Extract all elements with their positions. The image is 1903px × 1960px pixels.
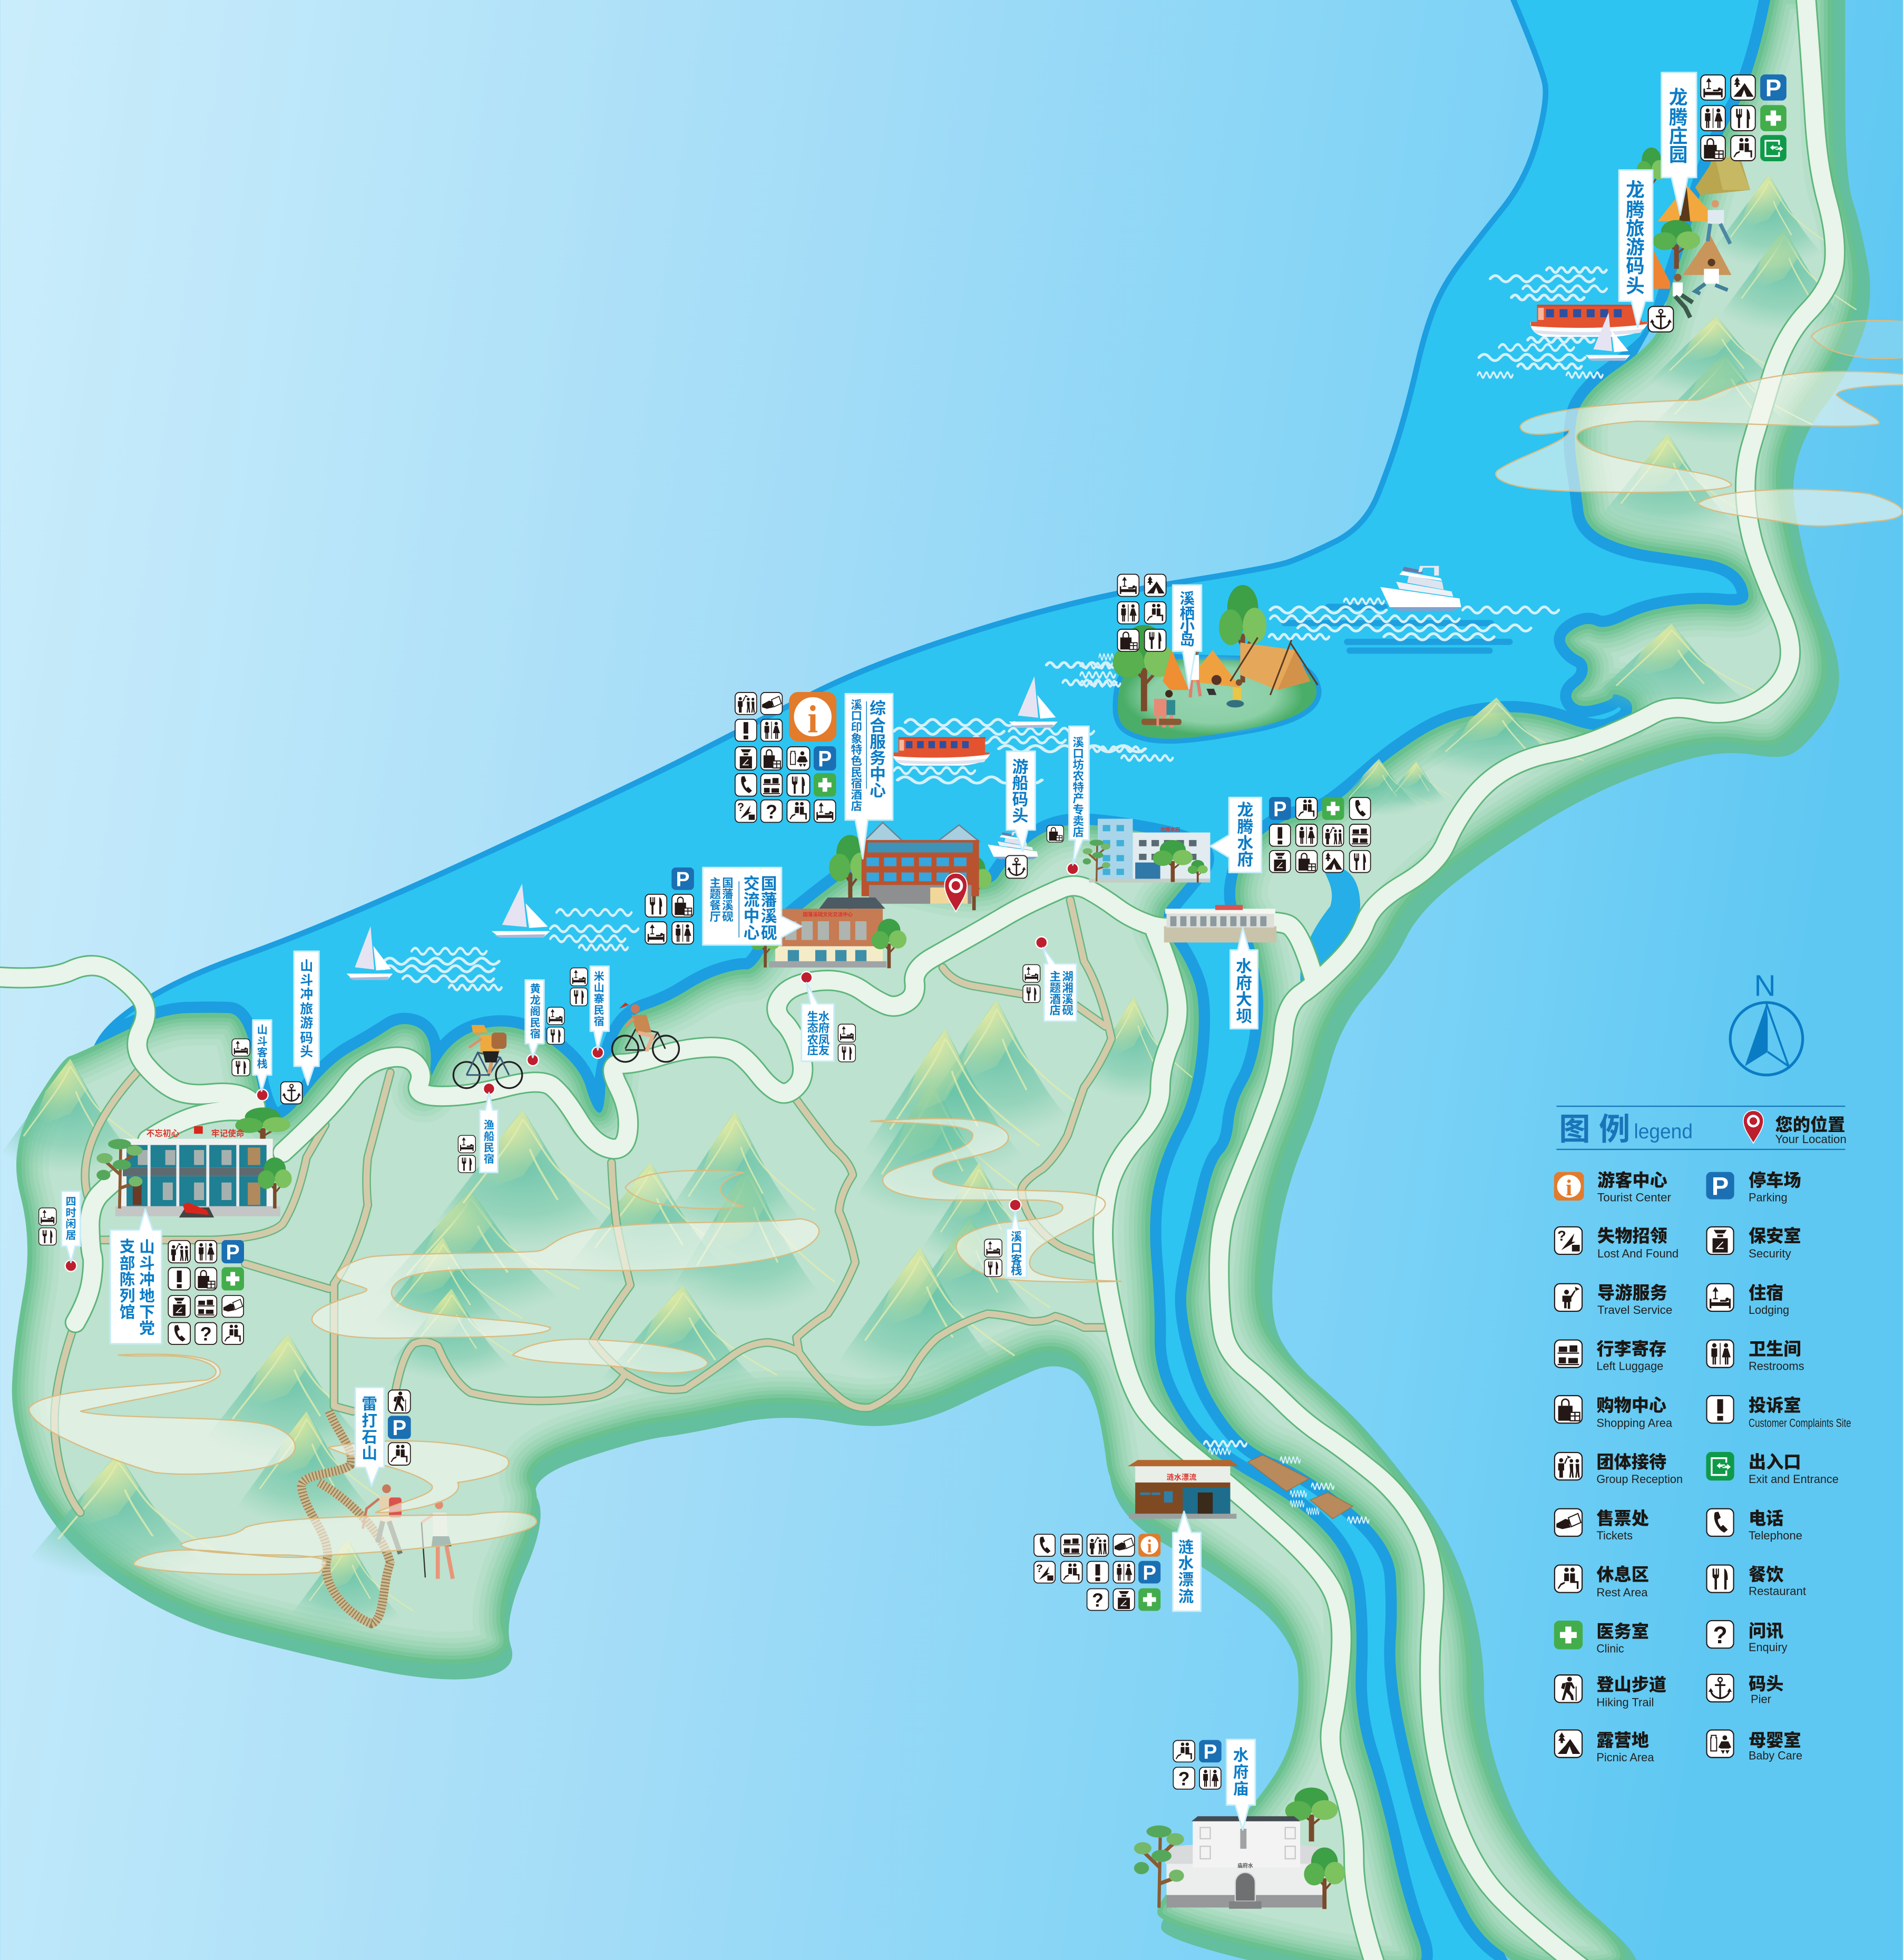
legend item: restrooms: 卫生间 [1749,1340,1801,1359]
small yacht at pier [988,832,1038,859]
legend item: restaurant: Restaurant [1749,1584,1807,1597]
legend item: left luggage: Left Luggage [1596,1360,1663,1373]
icon cluster: xikou inn [984,1239,1002,1276]
label: 湖湘溪砚主题酒店 [1043,948,1077,1021]
legend item: left luggage: 行李寄存 [1596,1340,1666,1359]
icon cluster: longteng manor [1701,74,1787,161]
legend item: hiking trail [1555,1675,1666,1709]
legend item: restaurant [1706,1565,1807,1597]
legend item: travel service: Travel Service [1597,1303,1672,1317]
legend header: 图 例 [1559,1111,1630,1147]
label: 雷打石山 [355,1388,384,1486]
icon: pier north [1648,306,1673,332]
yacht [1380,566,1461,611]
legend item: group reception: 团体接待 [1596,1453,1666,1473]
icon cluster: leidashi mountain [388,1390,411,1465]
legend item: parking: 停车场 [1749,1171,1801,1191]
label: 龙腾旅游码头: 龙腾旅游码头 [1626,179,1645,297]
label: 山斗冲旅游码头: 山斗冲旅游码头 [300,959,313,1059]
icon cluster: island [1117,574,1166,651]
legend item: tourist center: 游客中心 [1597,1171,1667,1191]
legend item: group reception: Group Reception [1596,1473,1683,1486]
legend item: left luggage [1555,1340,1666,1373]
legend item: clinic: Clinic [1596,1642,1624,1655]
red point markers [65,863,1078,1272]
label: 黄龙阁民宿 [525,980,544,1058]
building: shuifu temple: 庙府水 [1237,1862,1253,1869]
label: 龙腾水府: 龙腾水府 [1237,801,1253,869]
legend item: tickets [1555,1509,1649,1542]
label: 综合服务中心 [845,694,893,859]
rafts [1248,1455,1353,1519]
building: shandouchong party branch museum: 牢记使命 [211,1128,245,1138]
legend item: travel service: 导游服务 [1597,1283,1667,1303]
sailboat west 2 [492,884,550,938]
hiker man [363,1485,402,1554]
icon cluster: inn shandou [232,1039,250,1076]
legend item: parking: Parking [1749,1191,1788,1204]
legend item: shopping area: 购物中心 [1596,1396,1666,1416]
icon: pier at cruise dock [1006,855,1027,878]
building: dam [1164,905,1276,942]
label: 湖湘溪砚主题酒店: 主题酒店 [1050,971,1061,1017]
label: 溪口坊农特产专卖店: 溪口坊农特产专卖店 [1073,736,1084,839]
location pin: you are here [944,873,967,912]
legend item: security: 保安室 [1749,1226,1801,1246]
label: 雷打石山: 雷打石山 [362,1396,377,1462]
legend item: travel service [1555,1283,1672,1317]
legend item: exit and entrance: 出入口 [1749,1453,1801,1473]
label: 山斗客栈: 山斗客栈 [257,1024,268,1070]
icon cluster: four seasons inn [39,1208,56,1245]
legend item: rest area: 休息区 [1596,1565,1649,1585]
legend [1554,1106,1851,1764]
icon cluster: rafting [1034,1534,1160,1611]
label: 国藩溪砚交流中心: 交流中心 [744,875,760,942]
icon cluster: huanglongge [547,1007,564,1044]
label: 国藩溪砚交流中心: 主题餐厅 [710,877,721,923]
building: rafting station: 涟水漂流 [1166,1473,1196,1482]
legend item: complaints [1706,1396,1851,1429]
legend item: telephone: 电话 [1749,1509,1783,1528]
building: rafting station [1128,1460,1239,1519]
label: 山斗冲地下党支部陈列馆 [110,1209,162,1344]
legend item: tourist center: Tourist Center [1597,1191,1671,1204]
label: 湖湘溪砚主题酒店: 湖湘溪砚 [1062,971,1074,1017]
icon: shop at specialty store [1047,825,1063,842]
legend item: lodging [1706,1283,1789,1317]
water waves shadow bars [1282,604,1512,654]
legend item: clinic: 医务室 [1596,1622,1649,1642]
legend item: lost and found [1555,1226,1678,1260]
legend item: lodging: 住宿 [1749,1283,1783,1303]
label: 山斗客栈 [253,1020,271,1091]
sailboat north [1585,313,1630,360]
icon cluster: farm [838,1024,855,1062]
cyclist east [612,1002,679,1062]
land east strip [1186,0,1858,1960]
legend item: restrooms [1706,1340,1804,1373]
label: 涟水漂流 [1173,1512,1201,1611]
legend item: lost and found: 失物招领 [1597,1226,1667,1246]
legend item: hiking trail: Hiking Trail [1596,1696,1654,1709]
hiking trails [54,900,1111,1513]
label: 溪栖小岛: 溪栖小岛 [1180,591,1195,649]
legend item: parking [1706,1171,1801,1204]
legend item: complaints: Customer Complaints Site [1749,1416,1851,1429]
label: 游船码头: 游船码头 [1012,758,1029,825]
boat: north tour boat [1530,305,1648,337]
building: longteng shuifu: 龙腾水府 [1160,826,1180,833]
label: 渔船民宿: 渔船民宿 [484,1119,494,1165]
legend item: lost and found: Lost And Found [1597,1247,1678,1260]
building: shuifu temple [1134,1788,1345,1909]
label: 山斗冲地下党支部陈列馆: 山斗冲地下党 [139,1239,155,1338]
legend item: baby care: 母婴室 [1749,1730,1801,1750]
legend item: exit and entrance: Exit and Entrance [1749,1473,1839,1486]
legend header: Your Location [1775,1133,1847,1146]
icon cluster: longteng shuifu [1269,797,1371,873]
icon cluster: mishanzhai [570,968,588,1006]
label: 国藩溪砚交流中心: 国藩溪砚 [761,875,777,942]
building: shandouchong party branch museum: 不忘初心 [147,1128,180,1138]
legend item: picnic area: Picnic Area [1596,1751,1654,1764]
stepped mountain trail [301,1411,391,1624]
legend item: rest area [1555,1565,1649,1599]
boat: lake tour boat [893,737,990,766]
label: 龙腾旅游码头 [1619,170,1653,327]
label: 四时闲居: 四时闲居 [65,1196,76,1241]
legend item: exit and entrance [1706,1452,1839,1486]
label: 龙腾庄园: 龙腾庄园 [1669,87,1688,165]
legend item: shopping area [1555,1396,1673,1429]
label: 综合服务中心: 综合服务中心 [870,699,886,800]
icon cluster: museum [168,1240,244,1345]
label: 溪栖小岛 [1173,585,1202,689]
building: guofan cultural center [750,898,906,968]
legend item: rest area: Rest Area [1596,1586,1648,1599]
label: 水府凤友生态农庄: 生态农庄 [807,1011,818,1057]
hiker woman [422,1501,453,1579]
pond [1300,866,1360,995]
label: 龙腾水府 [1210,797,1262,873]
label: 四时闲居 [62,1191,80,1263]
building: guofan cultural center: 国藩溪砚文化交流中心 [803,912,853,918]
label: 国藩溪砚交流中心 [703,867,802,945]
label: 水府庙: 水府庙 [1233,1747,1249,1798]
legend item: pier: 码头 [1749,1675,1783,1694]
label: 水府凤友生态农庄 [802,982,834,1061]
legend item: clinic [1554,1621,1649,1655]
label: 水府大坝: 水府大坝 [1236,957,1252,1026]
sailboat middle [1009,676,1058,728]
building: service center [829,823,991,910]
mist clouds [29,320,1903,1575]
label: 龙腾庄园 [1662,73,1696,215]
mountains [0,175,1859,1629]
north arrow [1730,969,1803,1075]
legend item: restaurant: 餐饮 [1749,1565,1784,1585]
legend item: pier [1706,1674,1783,1706]
label: 水府大坝 [1230,928,1258,1029]
legend item: security: Security [1749,1247,1791,1260]
label: 渔船民宿 [480,1093,498,1173]
sailboat west 1 [347,927,393,980]
icon cluster: temple [1173,1740,1222,1790]
icon cluster: fishing boat inn [458,1135,475,1173]
label: 山斗冲旅游码头 [294,951,319,1085]
label: 涟水漂流: 涟水漂流 [1178,1539,1194,1605]
legend header [1556,1106,1847,1149]
legend item: restrooms: Restrooms [1749,1360,1804,1373]
label: 溪口客栈 [1007,1211,1027,1278]
icon cluster: guofan center [645,867,694,944]
label: 综合服务中心: 溪口印象特色民宿酒店 [851,699,862,813]
icon cluster: service center [735,692,836,823]
legend item: telephone: Telephone [1749,1529,1802,1542]
label: 米山寨民宿: 米山寨民宿 [594,971,604,1028]
icon: pier shandouchong [281,1082,302,1104]
label: 游船码头 [1007,751,1035,851]
label: 水府凤友生态农庄: 水府凤友 [818,1011,829,1057]
legend item: tourist center [1554,1171,1671,1204]
building: longteng shuifu [1083,819,1210,882]
label: 溪口坊农特产专卖店 [1069,726,1089,865]
legend item: pier: Pier [1751,1693,1771,1706]
legend item: picnic area: 露营地 [1596,1731,1649,1750]
legend item: baby care [1706,1730,1802,1762]
legend item: telephone [1706,1509,1802,1542]
legend item: hiking trail: 登山步道 [1596,1675,1666,1695]
legend item: shopping area: Shopping Area [1596,1416,1673,1429]
label: 溪口客栈: 溪口客栈 [1011,1231,1022,1277]
legend item: tickets: Tickets [1596,1529,1633,1542]
building: shandouchong party branch museum [96,1107,292,1217]
camp site north [1636,148,1750,317]
island [1115,655,1319,741]
icon cluster: hotel [1023,964,1040,1002]
legend item: enquiry: 问讯 [1749,1622,1783,1641]
legend item: complaints: 投诉室 [1749,1396,1801,1416]
legend header: legend [1634,1120,1693,1143]
legend item: enquiry [1706,1621,1788,1654]
label: 水府庙 [1226,1739,1255,1830]
legend header: 您的位置 [1775,1115,1845,1135]
legend item: group reception [1555,1452,1683,1486]
legend item: tickets: 售票处 [1596,1509,1649,1528]
legend item: picnic area [1555,1730,1654,1764]
legend item: security [1706,1226,1801,1260]
label: 国藩溪砚交流中心: 国藩溪砚 [722,877,734,923]
legend item: lodging: Lodging [1749,1303,1789,1317]
label: 黄龙阁民宿: 黄龙阁民宿 [530,983,541,1040]
water waves [384,268,1607,1523]
legend item: baby care: Baby Care [1749,1749,1802,1762]
main land west [12,825,1422,1960]
cyclist west [453,1025,522,1088]
island camp scene [1112,585,1318,727]
north arrow: N [1754,969,1776,1002]
label: 山斗冲地下党支部陈列馆: 支部陈列馆 [120,1238,135,1321]
label: 米山寨民宿 [590,966,609,1050]
legend item: enquiry: Enquiry [1749,1641,1788,1654]
